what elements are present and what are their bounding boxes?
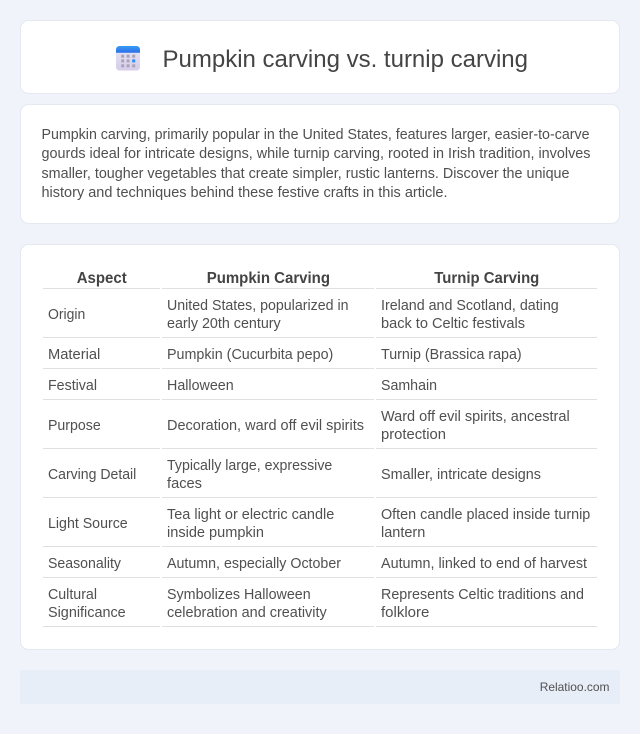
row: material: Pumpkin (Cucurbita pepo) (167, 347, 333, 363)
row: carving detail (48, 458, 541, 492)
row: seasonality: Seasonality (48, 556, 122, 572)
panel: title (20, 20, 620, 94)
row: origin (48, 298, 559, 332)
row: origin: Ireland and Scotland, dating (381, 298, 559, 314)
panel: description (20, 104, 620, 224)
row: cultural significance: celebration and creativity (167, 605, 328, 621)
description text (42, 127, 590, 201)
row: material: Turnip (Brassica rapa) (381, 347, 522, 363)
row: carving detail: Typically large, expressive (167, 458, 332, 474)
row: light source: Often candle placed inside turnip (381, 507, 590, 523)
footer (20, 670, 620, 704)
row: festival: Halloween (167, 378, 234, 394)
row: purpose: Ward off evil spirits, ancestral (381, 409, 570, 425)
row: origin: early 20th century (167, 316, 281, 332)
description text: Pumpkin carving, primarily popular in the United States, features larger, easier-to-carve (42, 127, 590, 143)
row: festival (48, 378, 437, 394)
table header: Pumpkin Carving (207, 270, 330, 287)
table header (77, 270, 539, 287)
row: origin: Origin (48, 307, 85, 323)
row: light source (48, 507, 590, 541)
row: festival: Samhain (381, 378, 437, 394)
row: light source: Light Source (48, 516, 128, 532)
row: cultural significance: folklore (381, 605, 429, 621)
description text: smaller, tougher vegetables that create simpler, rustic lanterns. Discover the unique (42, 166, 570, 182)
row: carving detail: Smaller, intricate designs (381, 467, 541, 483)
table header: Aspect (77, 270, 127, 287)
row: seasonality: Autumn, especially October (167, 556, 341, 572)
title text: Pumpkin carving vs. turnip carving (162, 46, 528, 73)
row: origin: United States, popularized in (167, 298, 348, 314)
row: cultural significance: Represents Celtic traditions and (381, 587, 584, 603)
row: purpose: Decoration, ward off evil spirits (167, 418, 364, 434)
row: cultural significance: Symbolizes Halloween (167, 587, 311, 603)
row: purpose: Purpose (48, 418, 101, 434)
row: carving detail: faces (167, 476, 202, 492)
table header: Turnip Carving (434, 270, 539, 287)
row: seasonality: Autumn, linked to end of harvest (381, 556, 587, 572)
row: purpose: protection (381, 427, 446, 443)
row: cultural significance: Significance (48, 605, 126, 621)
description text: history and techniques behind these festive crafts in this article. (42, 185, 448, 201)
panel: comparison table (20, 244, 620, 650)
row: purpose (48, 409, 570, 443)
row: cultural significance: Cultural (48, 587, 97, 603)
row: light source: lantern (381, 525, 425, 541)
row: material (48, 347, 522, 363)
icon: calendar (116, 46, 140, 70)
row: seasonality (48, 556, 587, 572)
row: light source: Tea light or electric candle (167, 507, 334, 523)
row: material: Material (48, 347, 100, 363)
row: light source: inside pumpkin (167, 525, 264, 541)
description text: gourds ideal for intricate designs, while turnip carving, rooted in Irish tradition, involves (42, 146, 590, 162)
row: festival: Festival (48, 378, 97, 394)
row: carving detail: Carving Detail (48, 467, 136, 483)
footer brand text: Relatioo.com (540, 680, 610, 694)
row: origin: back to Celtic festivals (381, 316, 525, 332)
row: cultural significance (48, 587, 584, 621)
